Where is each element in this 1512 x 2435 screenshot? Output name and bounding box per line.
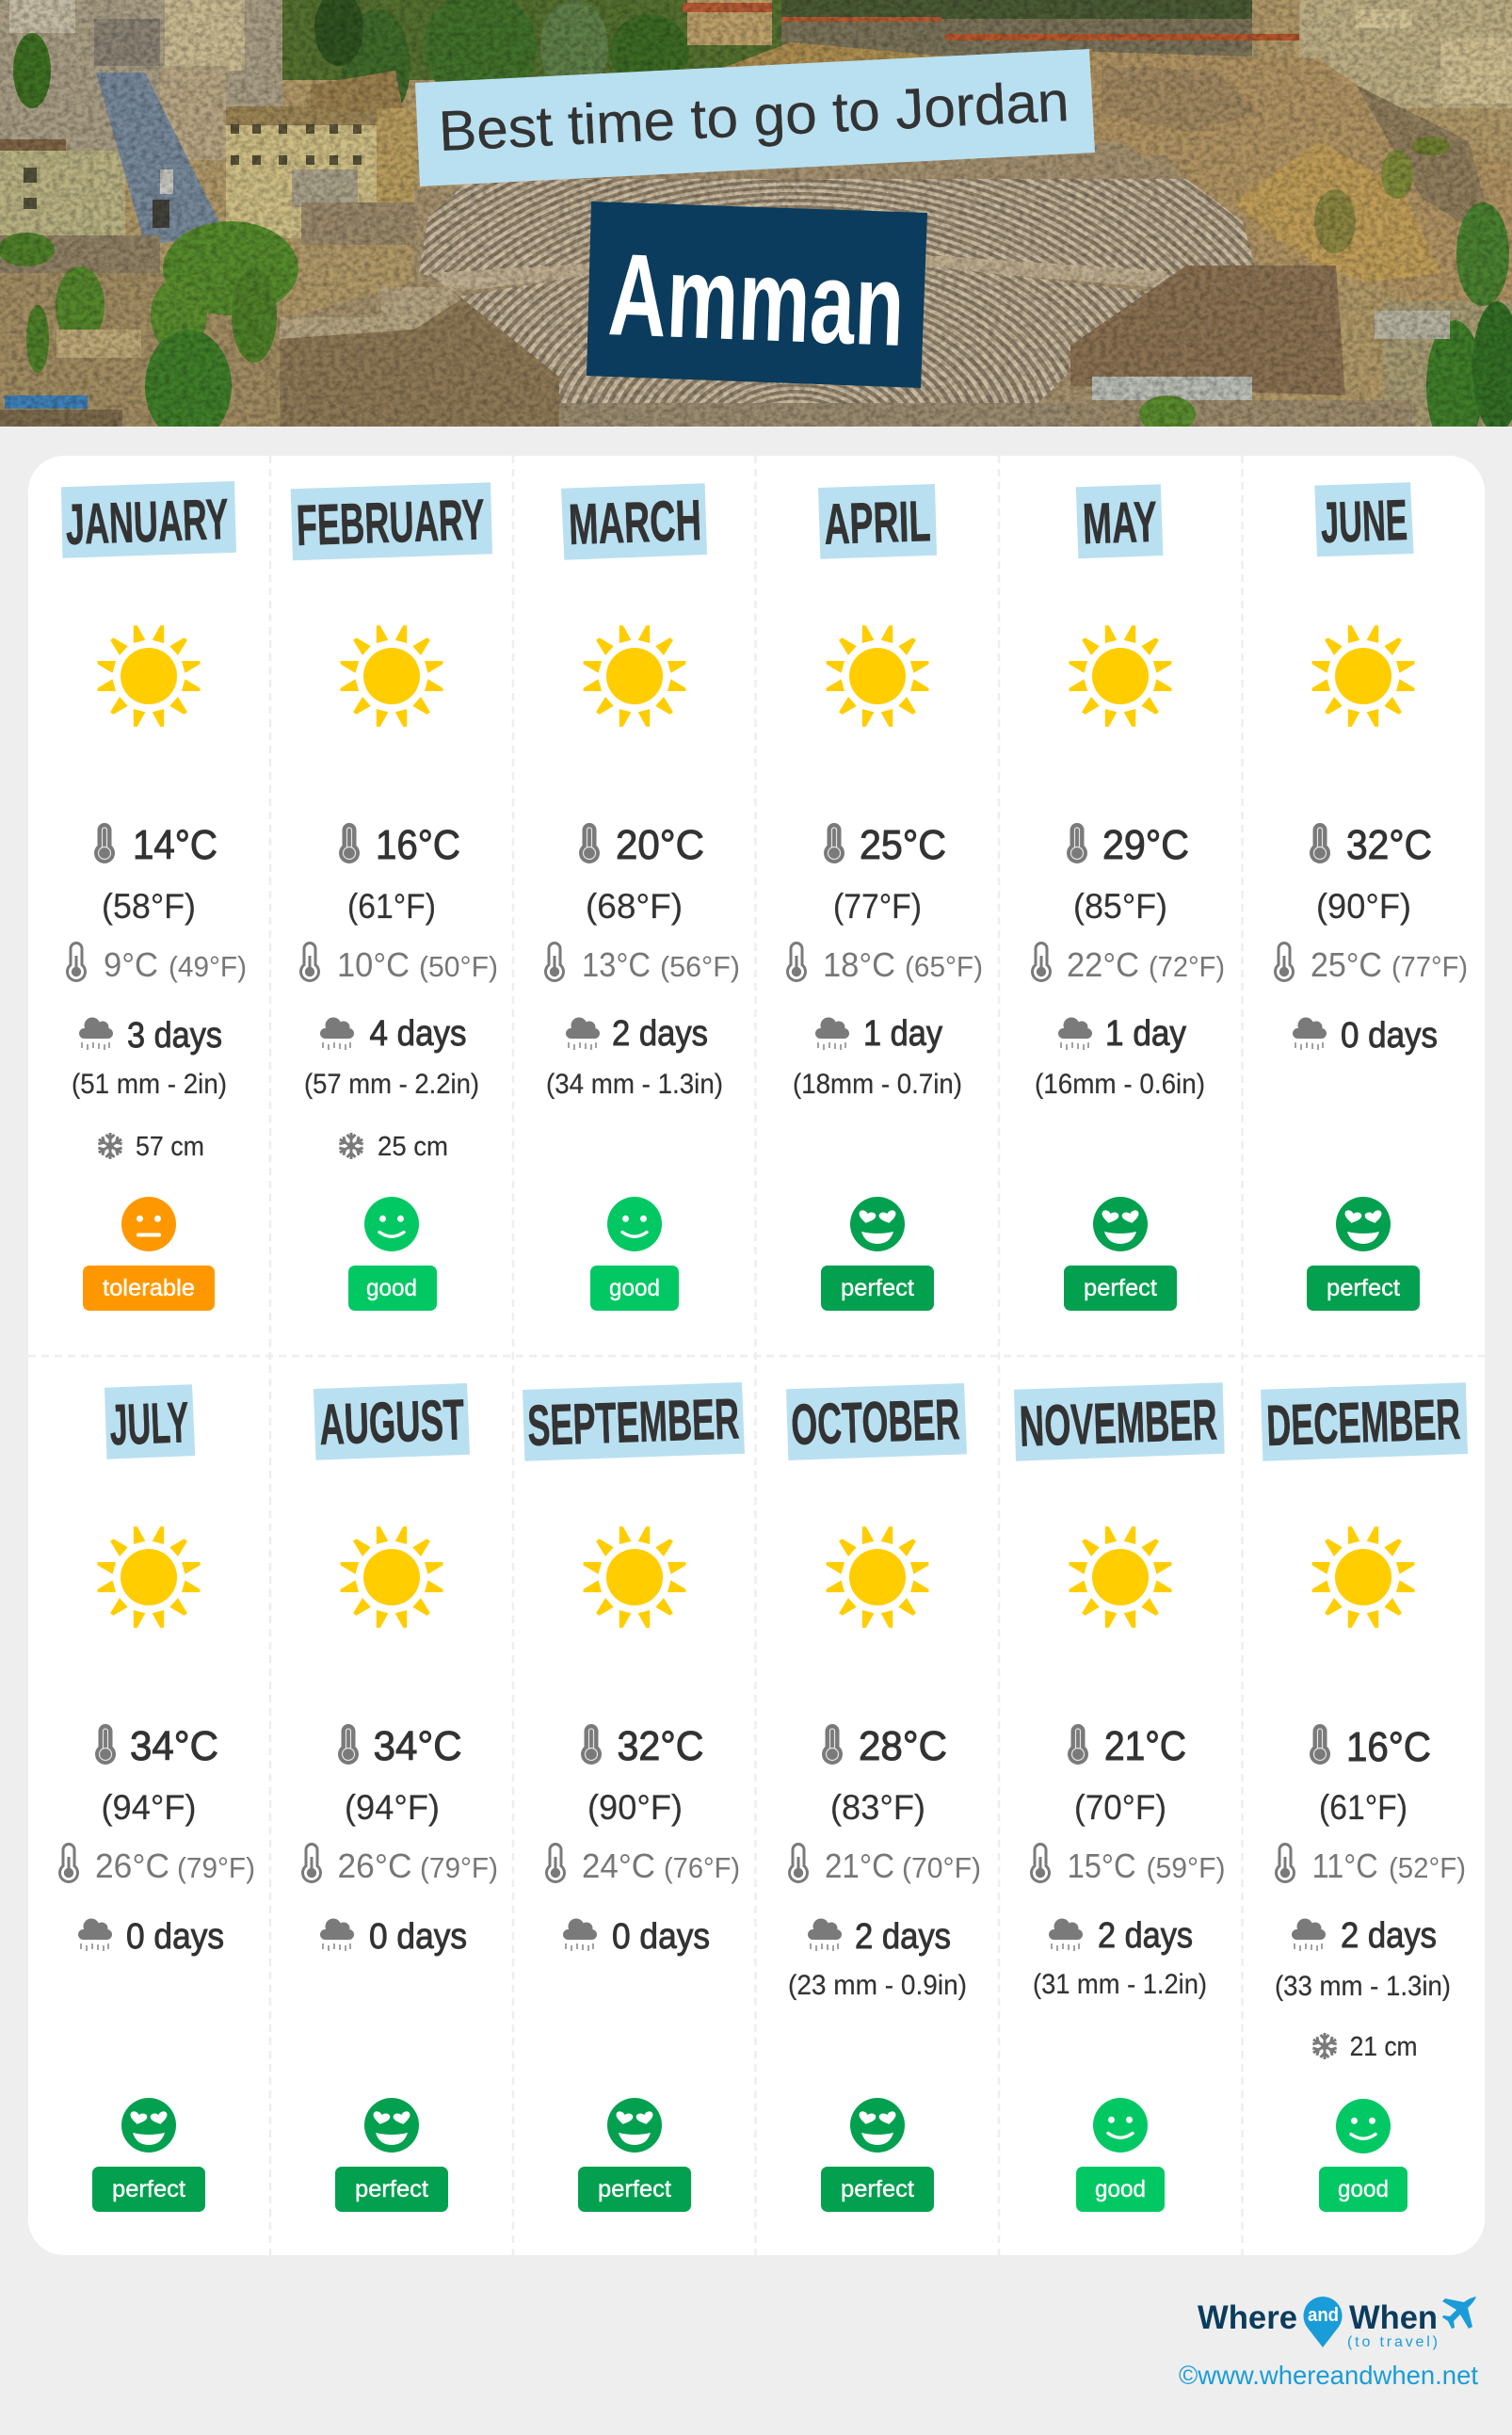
min temperature: 10°C	[337, 945, 410, 984]
panel: February	[291, 482, 498, 1311]
rain: (34 mm - 1.3in)	[546, 1069, 723, 1100]
max temperature: 34°C	[130, 1723, 218, 1769]
rain: (51 mm - 2in)	[72, 1069, 227, 1100]
max temperature: 20°C	[616, 822, 704, 868]
rating	[92, 2098, 205, 2212]
month label	[314, 1383, 470, 1460]
month label: NOVEMBER	[1019, 1387, 1218, 1459]
snow	[1311, 2032, 1418, 2062]
panel: October	[786, 1383, 981, 2212]
rating: tolerable	[103, 1275, 195, 1301]
rain: 3 days	[127, 1016, 222, 1056]
month label: JANUARY	[65, 487, 230, 556]
rain	[1293, 1016, 1438, 1056]
city name box	[587, 202, 927, 388]
logo: Where and When: and	[1308, 2305, 1339, 2326]
max temperature: (94°F)	[345, 1788, 440, 1827]
rating: good	[1338, 2176, 1389, 2202]
snow	[338, 1132, 448, 1162]
month label: OCTOBER	[790, 1387, 960, 1457]
min temperature: 11°C	[1312, 1846, 1378, 1885]
weather icon	[341, 625, 442, 727]
min temperature	[66, 942, 247, 984]
snow: 57 cm	[136, 1132, 204, 1162]
min temperature: (52°F)	[1389, 1851, 1466, 1884]
max temperature: (83°F)	[830, 1788, 925, 1827]
icon: map pin	[1303, 2297, 1342, 2347]
rating: perfect	[841, 1275, 914, 1301]
rating: perfect	[1084, 1275, 1157, 1301]
min temperature: 25°C	[1311, 945, 1382, 984]
rating: good	[366, 1275, 417, 1301]
weather icon	[1070, 1526, 1171, 1628]
panel: January	[61, 481, 247, 1311]
rain: 0 days	[1341, 1016, 1438, 1056]
icon: plane	[1442, 2297, 1476, 2329]
rating	[1076, 2098, 1165, 2212]
min temperature: 15°C	[1068, 1846, 1136, 1885]
max temperature: 29°C	[1102, 822, 1189, 868]
min temperature: 13°C	[582, 945, 651, 984]
month label	[786, 1383, 967, 1460]
rating: good	[1095, 2176, 1146, 2202]
panel: August	[301, 1383, 498, 2212]
rain	[72, 1016, 227, 1100]
rating: perfect	[598, 2176, 671, 2202]
logo: Where and When: (to travel)	[1347, 2334, 1438, 2350]
max temperature: 34°C	[374, 1723, 462, 1769]
rain	[793, 1014, 962, 1100]
lower seating	[459, 267, 1149, 403]
rain: 1 day	[863, 1014, 942, 1054]
min temperature	[786, 942, 983, 984]
max temperature: 16°C	[1346, 1724, 1431, 1770]
max temperature: (70°F)	[1074, 1788, 1166, 1827]
left tower	[280, 287, 559, 427]
min temperature: 26°C	[337, 1846, 412, 1885]
rain	[563, 1917, 710, 1957]
rating: good	[609, 1275, 660, 1301]
snow	[97, 1132, 204, 1162]
month label	[523, 1382, 745, 1461]
min temperature: 18°C	[823, 945, 895, 984]
rain: (23 mm - 0.9in)	[788, 1970, 967, 2001]
min temperature	[544, 942, 740, 984]
max temperature: (61°F)	[1319, 1788, 1407, 1827]
weather icon	[584, 1526, 685, 1628]
panel: July	[58, 1384, 255, 2212]
rain: 2 days	[1341, 1916, 1437, 1956]
snow: 25 cm	[378, 1132, 448, 1162]
rating	[1307, 1197, 1420, 1311]
weather icon	[1312, 1526, 1414, 1628]
min temperature: (79°F)	[420, 1851, 498, 1884]
rating	[348, 1197, 437, 1311]
month label	[1314, 482, 1414, 556]
max temperature	[822, 1723, 947, 1827]
weather icon	[98, 625, 200, 727]
month label: JUNE	[1320, 488, 1408, 555]
max temperature	[95, 1723, 218, 1827]
month label	[291, 482, 492, 560]
max temperature	[1067, 822, 1189, 926]
month label: SEPTEMBER	[526, 1386, 740, 1458]
max temperature	[1310, 822, 1432, 926]
panel: March	[544, 483, 740, 1311]
month label	[1076, 484, 1163, 558]
month label: MAY	[1082, 490, 1158, 556]
city name box: Amman	[606, 230, 907, 371]
weather icon	[1312, 625, 1414, 727]
min temperature: (70°F)	[902, 1851, 981, 1884]
rain: (31 mm - 1.2in)	[1033, 1969, 1207, 2000]
rating	[1064, 1197, 1177, 1311]
max temperature: 32°C	[618, 1723, 704, 1769]
panel: December	[1261, 1382, 1468, 2212]
rating: perfect	[112, 2176, 185, 2202]
logo: Where and When: Where	[1198, 2299, 1297, 2336]
min temperature	[58, 1843, 255, 1885]
max temperature: (90°F)	[587, 1788, 683, 1827]
max temperature: (77°F)	[833, 887, 922, 926]
panel: June	[1274, 482, 1468, 1311]
max temperature: 16°C	[376, 822, 460, 868]
min temperature	[301, 1843, 498, 1885]
max temperature: (94°F)	[102, 1788, 196, 1827]
logo: Where and When: When	[1349, 2299, 1438, 2336]
rain: (57 mm - 2.2in)	[304, 1069, 479, 1100]
min temperature	[1030, 1843, 1226, 1885]
rain: (16mm - 0.6in)	[1035, 1069, 1205, 1100]
max temperature: 14°C	[133, 822, 217, 868]
weather icon	[98, 1526, 200, 1628]
rain: 2 days	[855, 1917, 951, 1957]
rain: (33 mm - 1.3in)	[1275, 1971, 1451, 2002]
rain: 2 days	[612, 1014, 708, 1054]
right tower	[1070, 266, 1345, 395]
website credit: ©www.whereandwhen.net	[1179, 2361, 1478, 2390]
header photo: Roman theatre of Amman	[0, 0, 1512, 452]
rain	[78, 1917, 224, 1957]
max temperature	[339, 822, 460, 926]
max temperature: (90°F)	[1316, 887, 1411, 926]
min temperature: (59°F)	[1147, 1851, 1226, 1884]
min temperature: (77°F)	[1391, 950, 1468, 983]
rain: (18mm - 0.7in)	[793, 1069, 962, 1100]
month label: APRIL	[823, 489, 931, 556]
rating	[335, 2098, 448, 2212]
rain	[1033, 1916, 1207, 2000]
max temperature	[581, 1723, 704, 1827]
rating	[590, 1197, 679, 1311]
rating	[821, 1197, 934, 1311]
snow: 21 cm	[1350, 2032, 1418, 2062]
min temperature	[299, 942, 498, 984]
panel: November	[1014, 1382, 1226, 2212]
max temperature	[94, 822, 217, 926]
min temperature: (79°F)	[177, 1851, 255, 1884]
min temperature: (72°F)	[1149, 950, 1225, 983]
rain: 4 days	[369, 1014, 467, 1054]
max temperature: (61°F)	[347, 887, 436, 926]
max temperature: (68°F)	[586, 887, 683, 926]
theatre stone mass	[282, 155, 1252, 427]
month label: FEBRUARY	[296, 487, 486, 557]
month label: MARCH	[568, 488, 702, 556]
logo: Where and When	[1198, 2297, 1476, 2350]
max temperature: (85°F)	[1073, 887, 1167, 926]
min temperature	[545, 1843, 740, 1885]
weather icon	[1070, 625, 1171, 727]
upper seating	[419, 179, 1257, 282]
panel: September	[523, 1382, 745, 2212]
max temperature: 21°C	[1104, 1723, 1186, 1769]
rating: perfect	[841, 2176, 914, 2202]
rain	[546, 1014, 723, 1100]
min temperature	[1275, 1843, 1466, 1885]
rain	[1035, 1014, 1205, 1100]
max temperature: (58°F)	[102, 887, 196, 926]
max temperature	[338, 1723, 462, 1827]
month label	[1014, 1382, 1225, 1461]
rating: perfect	[1327, 1275, 1400, 1301]
rain: 1 day	[1105, 1014, 1186, 1054]
month label: JULY	[108, 1390, 190, 1457]
min temperature: 24°C	[582, 1846, 655, 1885]
min temperature: 9°C	[104, 945, 158, 984]
rating	[821, 2098, 934, 2212]
rain	[304, 1014, 479, 1100]
title banner	[415, 49, 1095, 186]
rating: perfect	[355, 2176, 428, 2202]
min temperature	[1274, 942, 1468, 984]
max temperature	[579, 822, 704, 926]
rain	[1275, 1916, 1451, 2002]
wall band between seating tiers	[429, 256, 1167, 292]
weather icon	[584, 625, 685, 727]
month label	[105, 1384, 195, 1459]
rain: 2 days	[1098, 1916, 1193, 1956]
title banner: Best time to go to Jordan	[437, 70, 1070, 163]
min temperature: (56°F)	[660, 950, 740, 983]
min temperature: (65°F)	[905, 950, 983, 983]
min temperature	[1031, 942, 1225, 984]
month label	[818, 484, 937, 559]
min temperature: (50°F)	[419, 950, 498, 983]
min temperature: 21°C	[825, 1846, 894, 1885]
max temperature	[1310, 1724, 1431, 1827]
rain	[788, 1917, 967, 2001]
weather icon	[827, 1526, 928, 1628]
min temperature: 22°C	[1067, 945, 1139, 984]
min temperature: 26°C	[95, 1846, 169, 1885]
max temperature: 28°C	[859, 1723, 947, 1769]
rain: 0 days	[126, 1917, 224, 1957]
white calendar card	[28, 456, 1485, 2255]
month label	[561, 483, 707, 560]
rating	[1319, 2099, 1407, 2212]
panel: April	[786, 484, 983, 1311]
max temperature	[824, 822, 946, 926]
max temperature	[1068, 1723, 1186, 1827]
max temperature: 32°C	[1346, 822, 1432, 868]
rain: 0 days	[369, 1917, 467, 1957]
month label	[61, 481, 236, 558]
rating	[578, 2098, 691, 2212]
weather icon	[341, 1526, 442, 1628]
weather icon	[827, 625, 928, 727]
rating	[83, 1197, 215, 1311]
min temperature	[788, 1843, 981, 1885]
max temperature: 25°C	[860, 822, 946, 868]
month label: AUGUST	[318, 1387, 465, 1457]
rain	[320, 1917, 467, 1957]
min temperature: (49°F)	[169, 950, 247, 983]
panel: May	[1031, 484, 1225, 1311]
rain: 0 days	[612, 1917, 710, 1957]
min temperature: (76°F)	[664, 1851, 740, 1884]
